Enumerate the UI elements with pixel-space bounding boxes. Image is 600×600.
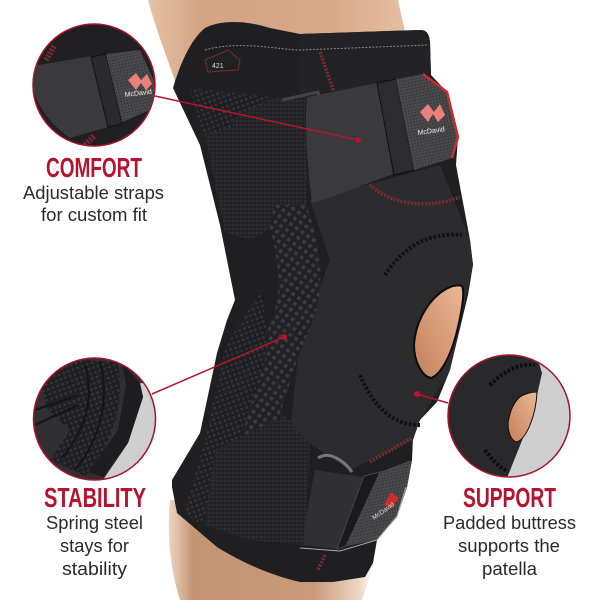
- text: comfort description: [23, 182, 164, 225]
- logo: [420, 104, 445, 122]
- text: stability description: stability: [62, 558, 128, 579]
- text: support description: Padded buttress: [443, 512, 576, 533]
- leader line: support: [414, 391, 448, 403]
- text: support description: patella: [482, 558, 538, 579]
- lower strap: McDavid: [371, 501, 396, 522]
- tag red edge: [423, 74, 458, 158]
- upper strap buckle: [377, 79, 414, 175]
- photo: knee brace on leg: [148, 0, 473, 600]
- inset ring: comfort: [33, 24, 155, 146]
- comfort buckle: [91, 54, 122, 127]
- mesh upper panel: [190, 88, 308, 190]
- velcro flap upper 2: [232, 95, 306, 232]
- stability grey corner: [104, 383, 155, 478]
- stability black edge: [88, 362, 143, 477]
- inset ring: support: [448, 355, 570, 477]
- lower strap tag: [346, 460, 412, 546]
- leader line: comfort: [155, 96, 361, 143]
- mesh side band: [225, 190, 320, 440]
- leader line: stability: [152, 334, 287, 394]
- top band with stitching: [300, 30, 431, 97]
- upper strap tag: [396, 74, 458, 170]
- stability mesh folds: [40, 360, 120, 476]
- red stitching: [318, 52, 460, 570]
- upper strap ring: [282, 92, 325, 120]
- lower logo: [384, 492, 399, 508]
- inset: stability: [33, 358, 160, 480]
- inset ring: stability: [34, 358, 156, 480]
- text: stability description: [46, 512, 143, 579]
- upper leg skin: [148, 0, 407, 95]
- support hole: [508, 392, 537, 442]
- text: support description: supports the: [458, 535, 560, 556]
- heading: support: SUPPORT: [463, 482, 556, 513]
- size tag 421: 421: [212, 63, 224, 70]
- heading: comfort: COMFORT: [46, 152, 142, 183]
- text: comfort description: for custom fit: [41, 204, 147, 225]
- comfort background: [33, 24, 155, 146]
- padded buttress stitching: [360, 235, 462, 425]
- text: stability description: Spring steel: [46, 512, 143, 533]
- mesh side seam: [184, 290, 268, 526]
- size tag 421: [205, 50, 240, 72]
- inset: comfort: McDavid: [124, 89, 152, 99]
- upper strap: [306, 74, 458, 203]
- support stitches: [490, 365, 535, 385]
- lower strap buckle: [337, 472, 380, 549]
- heading: stability: STABILITY: [44, 482, 146, 513]
- inset: support: [445, 350, 571, 478]
- lower leg skin: [169, 500, 375, 600]
- neoprene front panel: [290, 165, 473, 470]
- lower strap: [300, 460, 412, 551]
- velcro flap upper: [205, 125, 268, 240]
- comfort logo: [128, 73, 152, 90]
- support knee: [445, 350, 542, 478]
- text: comfort description: Adjustable straps: [23, 182, 164, 203]
- inset: comfort: [33, 24, 156, 146]
- text: support description: [443, 512, 576, 579]
- patella opening: [414, 285, 463, 378]
- upper strap: McDavid: [417, 126, 445, 137]
- stability background: [34, 358, 143, 480]
- velcro flap lower: [205, 415, 310, 545]
- comfort tag: [106, 50, 156, 122]
- lower strap ring: [318, 455, 352, 472]
- support background: [508, 364, 570, 476]
- text: stability description: stays for: [60, 535, 129, 556]
- brace body: [172, 22, 473, 582]
